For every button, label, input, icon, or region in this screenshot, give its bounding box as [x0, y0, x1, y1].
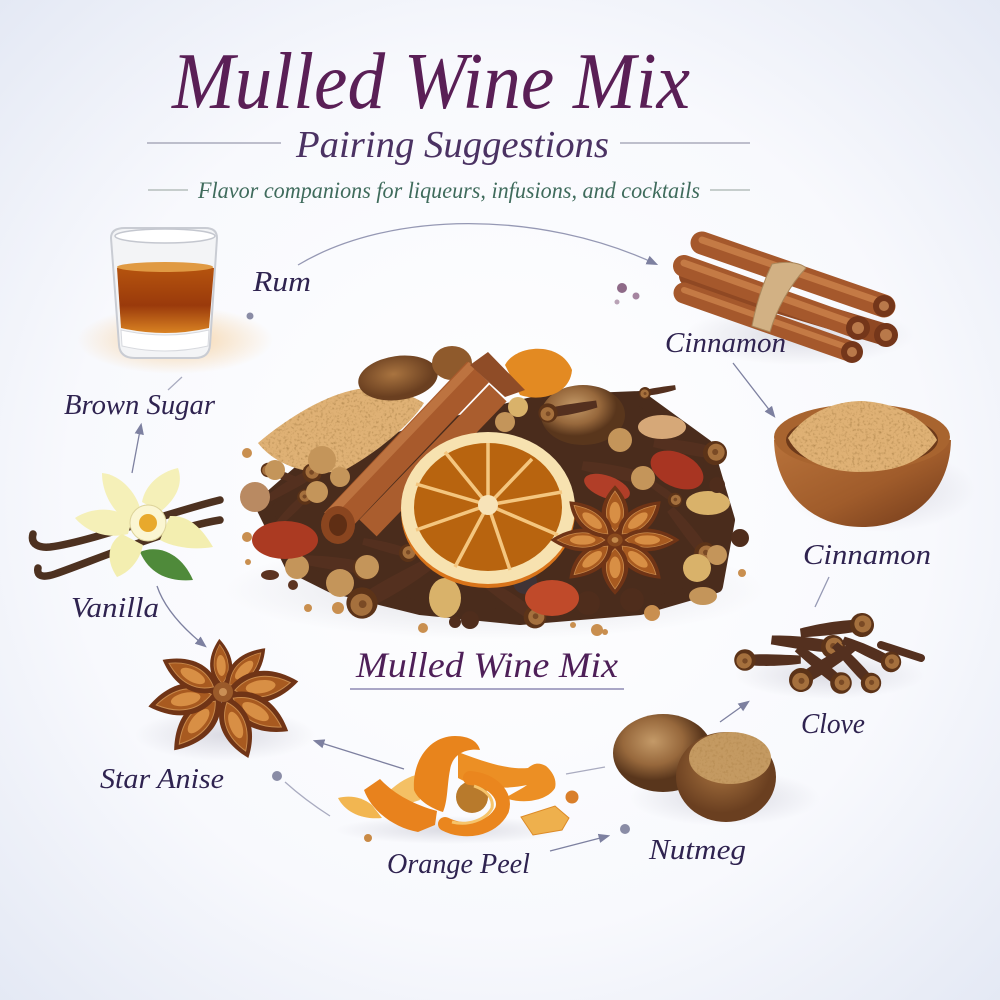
sugar mound [258, 387, 424, 472]
scattered crumbs [242, 448, 746, 636]
arrow: peel to star anise [315, 741, 404, 769]
pile base [262, 398, 728, 618]
label: orange peel: Orange Peel [387, 848, 530, 880]
label: star anise: Star Anise [100, 763, 224, 795]
arrow: nutmeg to clove [720, 702, 748, 722]
icon: cinnamon bundle [684, 240, 915, 365]
label: brown sugar: Brown Sugar [64, 389, 216, 421]
icon: star anise [135, 638, 315, 763]
connector: cinnamon to clove [815, 577, 829, 607]
dark buds [449, 477, 749, 629]
icon: orange peel [335, 736, 578, 844]
label: cinnamon lower: Cinnamon [803, 539, 931, 571]
central pile [225, 346, 765, 640]
label: cinnamon top: Cinnamon [665, 327, 786, 359]
icon: wooden bowl with sugar [774, 401, 975, 532]
label: nutmeg: Nutmeg [648, 834, 746, 866]
orange slice [401, 436, 575, 588]
caption: mulled wine mix: Mulled Wine Mix [355, 645, 618, 685]
cinnamon sticks [368, 393, 498, 528]
arrow: cinnamon to bowl [733, 363, 774, 416]
red berries [252, 521, 318, 559]
label: rum: Rum [252, 266, 311, 298]
arrow: vanilla to brown sugar [132, 425, 141, 473]
arrow: orange peel to nutmeg [550, 824, 630, 851]
icon: vanilla flower and pods [32, 468, 220, 580]
connector: peel dots [272, 771, 330, 816]
subtitle: pairing suggestions: Pairing Suggestions [295, 124, 609, 166]
arrow: rum to cinnamon [298, 224, 656, 265]
connector: brown sugar to rum [168, 377, 182, 390]
label: clove: Clove [801, 708, 865, 740]
star anise in pile [550, 485, 680, 595]
icon: rum glass [77, 228, 273, 374]
icon: nutmeg [613, 714, 820, 826]
arrow: vanilla to star anise [157, 586, 205, 646]
title: Mulled Wine Mix [171, 38, 690, 126]
tan lumps [240, 397, 730, 618]
connector: nutmeg to peel [566, 767, 605, 774]
nuts [355, 351, 441, 405]
icon: cloves [734, 612, 925, 699]
tagline: Flavor companions for liqueurs, infusions, and cocktails [197, 178, 700, 203]
dot [246, 312, 254, 320]
label: vanilla: Vanilla [71, 592, 159, 624]
dots near cinnamon [614, 283, 640, 304]
cloves in pile [259, 382, 729, 633]
